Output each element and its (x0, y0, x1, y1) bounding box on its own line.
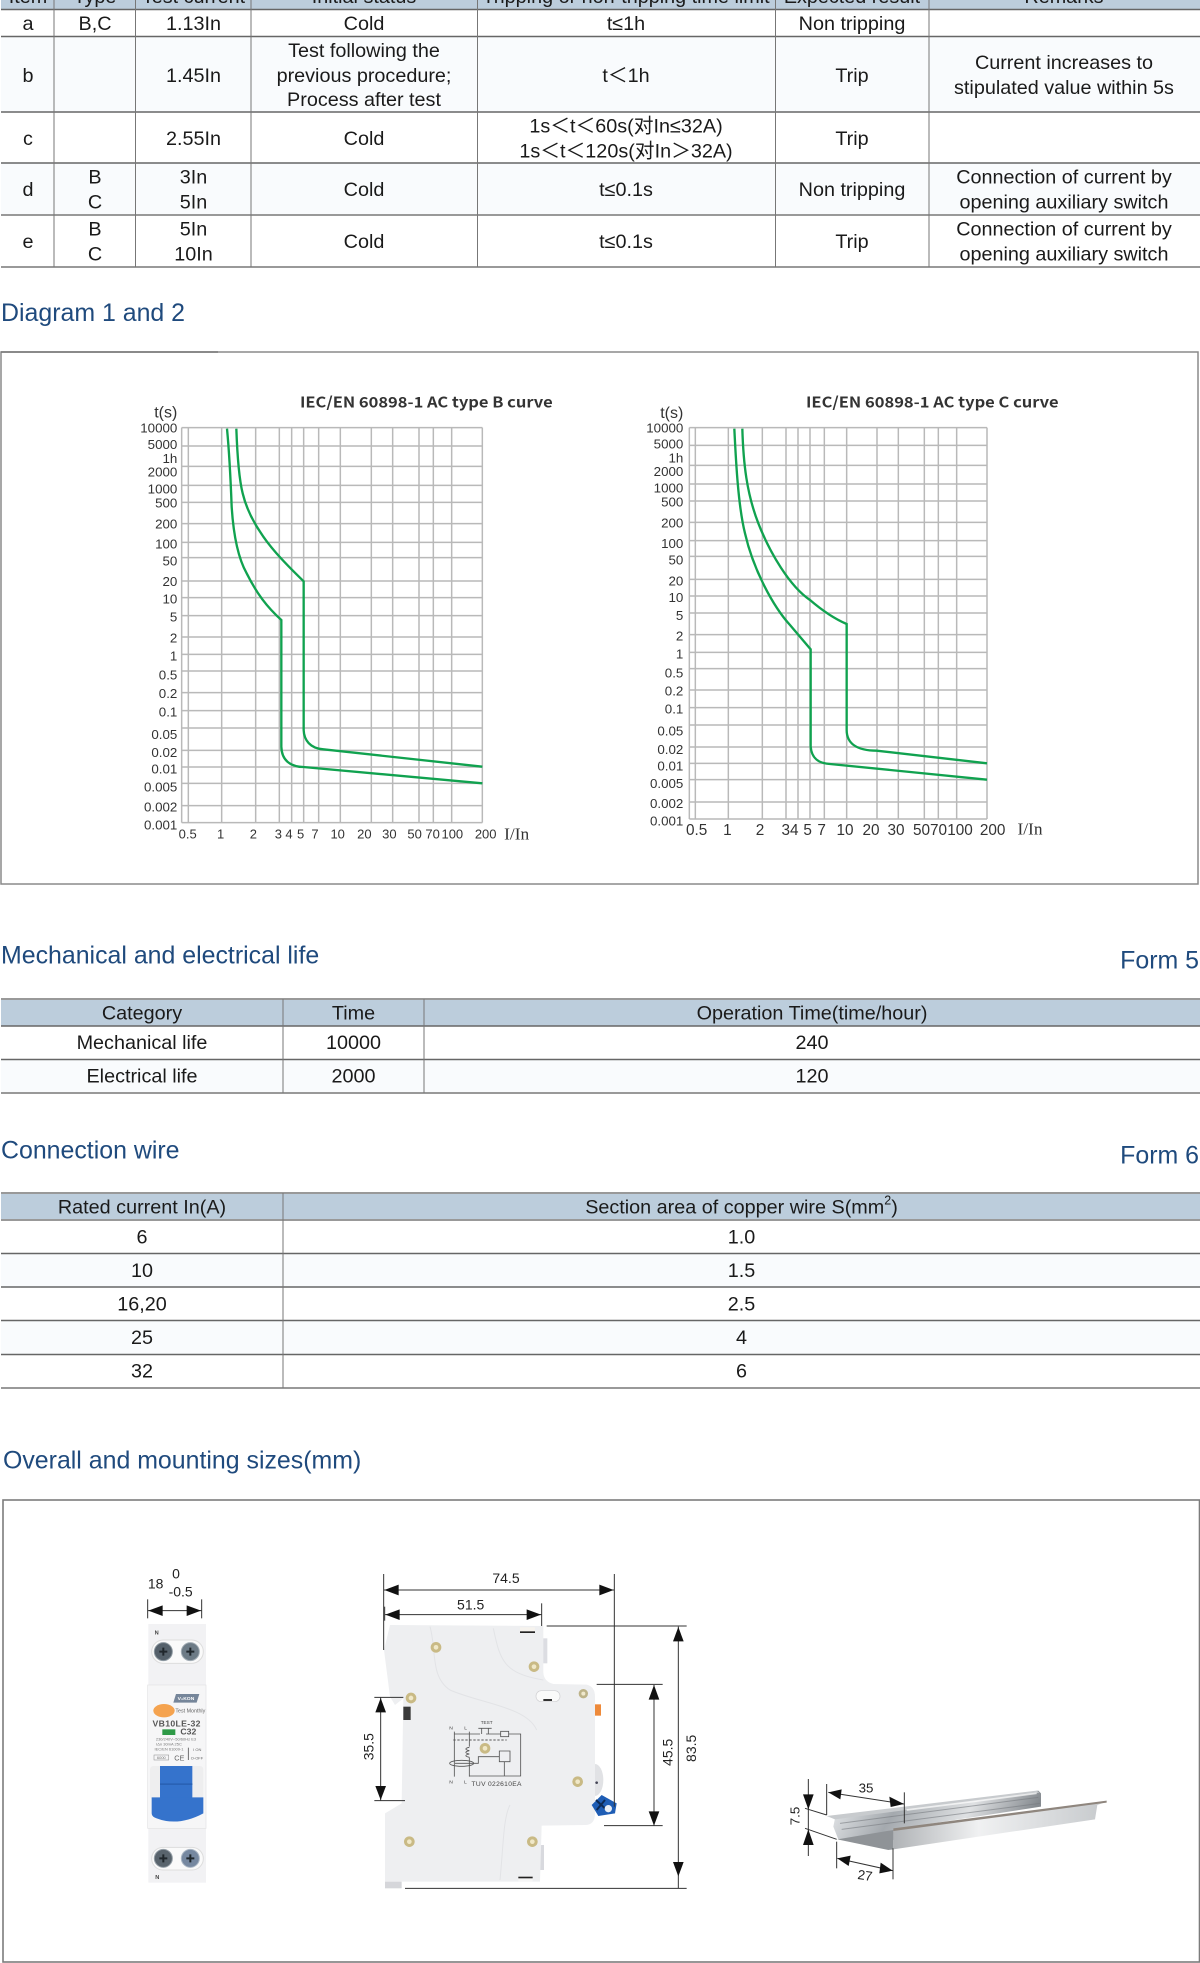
row 32A (131, 1360, 747, 1382)
row a (22, 13, 905, 35)
x axis labels C: 200 (980, 822, 1005, 839)
breaker body front (148, 1624, 206, 1883)
row b (22, 40, 1174, 111)
row d: B (88, 166, 102, 188)
dimension 45.5: 45.5 (660, 1739, 676, 1766)
row e (22, 218, 1172, 266)
electrical life row: Electrical life (86, 1066, 198, 1088)
width dimension: -0.5 (169, 1584, 193, 1600)
y axis labels C: 10000 (646, 420, 683, 435)
row 6A: 1.0 (728, 1226, 755, 1248)
rail body (827, 1791, 1107, 1850)
row 10A: 1.5 (728, 1260, 755, 1282)
width dimension: 0 (172, 1565, 180, 1581)
table: mechanical and electrical life (1, 999, 1200, 1093)
x axis labels B: 20 (357, 827, 372, 842)
header row: ) (891, 1196, 898, 1218)
row c: 1s＜t＜60s(对In≤32A) (529, 116, 723, 138)
x axis labels C: 7 (817, 822, 826, 839)
x axis labels B: 2 (250, 827, 257, 842)
width dimension: 18 (148, 1575, 164, 1591)
dimension 7.5 (787, 1779, 837, 1856)
row e: Cold (344, 231, 384, 253)
row d: t≤0.1s (599, 179, 653, 201)
y axis labels B: 1000 (148, 481, 177, 496)
row b: previous procedure; (277, 65, 451, 87)
row d: Non tripping (799, 179, 905, 201)
row e: Trip (835, 231, 869, 253)
y axis labels C: 0.005 (650, 776, 683, 791)
mechanical life row: Mechanical life (77, 1032, 207, 1054)
dimension 7.5: 7.5 (787, 1807, 802, 1825)
row b: b (22, 65, 34, 87)
breaker body front: C32 (180, 1726, 196, 1736)
row d: Connection of current by (956, 166, 1172, 188)
header row: Operation Time(time/hour) (697, 1002, 927, 1024)
dimension 74.5 (384, 1570, 614, 1807)
x axis labels B: 4 (285, 827, 293, 842)
x axis labels C: 1 (723, 822, 732, 839)
y axis labels C: 0.05 (657, 723, 683, 738)
row 25A: 25 (131, 1327, 153, 1349)
y axis labels C: 5 (676, 608, 683, 623)
row b: Current increases to (975, 52, 1153, 74)
x axis labels B: 1 (217, 827, 224, 842)
wiring schematic: N (449, 1780, 453, 1786)
row b: Process after test (287, 89, 441, 111)
y axis labels C: 2000 (654, 464, 683, 479)
y axis labels B: 200 (155, 516, 177, 531)
y axis labels B: 0.2 (159, 686, 177, 701)
y axis labels B: 0.005 (144, 780, 177, 795)
row a: Non tripping (799, 13, 905, 35)
heading: diagrams: Diagram 1 and 2 (1, 299, 185, 327)
x axis labels B: 10 (330, 827, 345, 842)
wiring schematic: L (464, 1725, 467, 1731)
dimension 35 (827, 1780, 904, 1823)
y axis labels C: 0.002 (650, 796, 683, 811)
front view breaker with width dimension (148, 1565, 206, 1883)
breaker body front: IΔn 30mA 25C (156, 1741, 182, 1746)
x axis labels C (686, 819, 1043, 839)
x axis labels B: 7 (311, 827, 319, 842)
header row (102, 1002, 927, 1024)
electrical life row: 120 (795, 1066, 829, 1088)
row d: d (22, 179, 34, 201)
row a: 1.13In (166, 13, 221, 35)
mechanical life row (77, 1032, 829, 1054)
heading: mechanical and electrical life: Mechanical and electrical life (1, 942, 319, 970)
y axis labels C: 10 (669, 590, 683, 605)
dimension 51.5: 51.5 (457, 1596, 484, 1612)
row a: a (22, 13, 34, 35)
breaker body front: CE (174, 1754, 185, 1763)
x axis labels C: 2 (756, 822, 764, 839)
y axis labels B: 100 (155, 537, 177, 552)
x axis labels C: I/In (1017, 819, 1043, 838)
header row (58, 1194, 898, 1218)
row 6A (136, 1226, 755, 1248)
row a: t≤1h (607, 13, 645, 35)
mechanical life row: 240 (795, 1032, 829, 1054)
x axis labels C: 34 (781, 822, 799, 839)
row 10A (131, 1260, 755, 1282)
dimension 83.5 (405, 1626, 699, 1888)
header row: 2 (884, 1194, 891, 1208)
y axis labels B: 5000 (148, 437, 177, 452)
breaker body front: Test Monthly (175, 1709, 206, 1715)
y axis labels B: 0.01 (151, 762, 177, 777)
x axis labels B: 0.5 (179, 827, 197, 842)
row d: 5In (180, 192, 207, 214)
header row: Rated current In(A) (58, 1196, 226, 1218)
DIN rail with dimensions (787, 1779, 1107, 1884)
breaker body front: O-OFF (191, 1755, 204, 1760)
table: tripping characteristic tests (1, 0, 1200, 267)
electrical life row: 2000 (331, 1066, 376, 1088)
x axis labels C: 0.5 (686, 822, 707, 839)
y axis labels B: 0.5 (159, 668, 177, 683)
form 6 label: Form 6 (1120, 1142, 1199, 1170)
x axis labels B: 3 (275, 827, 282, 842)
breaker body front: 6000 (157, 1755, 167, 1760)
row b: stipulated value within 5s (954, 77, 1174, 99)
y axis labels B: 2 (170, 631, 177, 646)
wiring schematic (449, 1720, 522, 1788)
row 32A: 32 (131, 1360, 153, 1382)
y axis labels B: 2000 (148, 465, 177, 480)
row 16,20A: 2.5 (728, 1294, 755, 1316)
y axis labels C: 50 (669, 553, 683, 568)
row d: C (88, 192, 102, 214)
panel: overall and mounting sizes (3, 1500, 1200, 1962)
row d: Cold (344, 179, 384, 201)
row 25A: 4 (736, 1327, 747, 1349)
row a: B,C (79, 13, 111, 35)
row c: 1s＜t＜120s(对In＞32A) (519, 140, 733, 162)
curve lower B (227, 429, 482, 783)
x axis labels C: 100 (947, 822, 973, 839)
x axis labels B: 100 (441, 827, 463, 842)
chart: type C curve (646, 391, 1059, 839)
y axis labels C: 1h (669, 451, 683, 466)
header row: Time (332, 1002, 375, 1024)
y axis labels C: 0.5 (665, 665, 683, 680)
dimension 45.5 (597, 1684, 676, 1826)
row 6A: 6 (136, 1226, 148, 1248)
side view breaker with dimensions (360, 1570, 699, 1888)
y axis labels B: 10 (163, 592, 177, 607)
y axis labels C: 0.1 (665, 702, 683, 717)
breaker body front: 230/240V~50/60Hz E3 (156, 1736, 197, 1741)
y axis labels C: 0.01 (657, 759, 683, 774)
grid C (689, 428, 987, 819)
heading: connection wire: Connection wire (1, 1136, 179, 1164)
row e: 10In (174, 244, 213, 266)
row b: 1.45In (166, 65, 221, 87)
x axis labels C: 10 (836, 822, 854, 839)
y axis labels C: 500 (661, 495, 683, 510)
width dimension (148, 1565, 202, 1618)
dimension 74.5: 74.5 (492, 1570, 520, 1586)
y axis labels C: t(s) (660, 405, 683, 422)
y axis labels B: 0.1 (159, 704, 177, 719)
row d (22, 166, 1172, 214)
wiring schematic: N (449, 1725, 453, 1731)
x axis labels C: 30 (887, 822, 905, 839)
y axis labels C: 1000 (654, 481, 683, 496)
y axis labels B: 5 (170, 610, 177, 625)
y axis labels C: 0.001 (650, 814, 683, 829)
breaker body front: I ON (193, 1747, 202, 1752)
y axis labels B: 500 (155, 495, 177, 510)
x axis labels B (179, 824, 530, 843)
row c: 2.55In (166, 128, 221, 150)
y axis labels B: 1 (170, 648, 177, 663)
y axis labels C: 100 (661, 536, 683, 551)
form 5 label: Form 5 (1120, 946, 1199, 974)
y axis labels B (140, 404, 177, 832)
breaker body front: N (155, 1875, 159, 1881)
x axis labels B: 30 (382, 827, 397, 842)
x axis labels B: 50 (407, 827, 422, 842)
y axis labels C (646, 405, 683, 829)
breaker body front: VB10LE-32 (153, 1719, 201, 1729)
curve upper C (742, 429, 987, 763)
y axis labels B: 10000 (140, 420, 177, 435)
x axis labels B: I/In (504, 824, 530, 843)
y axis labels C: 5000 (654, 437, 683, 452)
x axis labels B: 70 (425, 827, 440, 842)
y axis labels B: 50 (163, 554, 177, 569)
curve upper B (236, 429, 482, 767)
chart: type B curve (140, 391, 553, 843)
table: connection wire (1, 1193, 1200, 1388)
header row: Section area of copper wire S(mm (585, 1196, 884, 1218)
y axis labels C: 0.2 (665, 683, 683, 698)
dimension 83.5: 83.5 (683, 1735, 699, 1762)
y axis labels B: 0.02 (151, 745, 177, 760)
row c: Cold (344, 128, 384, 150)
row b: Trip (835, 65, 869, 87)
y axis labels C: 20 (669, 573, 683, 588)
row b: t＜1h (602, 65, 650, 87)
row 16,20A (117, 1294, 755, 1316)
row 25A (131, 1327, 747, 1349)
row c: c (23, 128, 33, 150)
heading: overall and mounting sizes: Overall and mounting sizes(mm) (3, 1446, 361, 1474)
row e: t≤0.1s (599, 231, 653, 253)
chart title C: IEC/EN 60898-1 AC type C curve (806, 391, 1059, 412)
row 32A: 6 (736, 1360, 747, 1382)
row d: opening auxiliary switch (960, 192, 1168, 214)
row e: 5In (180, 218, 207, 240)
panel: trip curve diagrams (1, 352, 1198, 884)
y axis labels C: 1 (676, 646, 683, 661)
dimension 35.5: 35.5 (360, 1733, 376, 1760)
dimension 27: 27 (857, 1867, 873, 1884)
wiring schematic: TUV 022610EA (472, 1781, 522, 1788)
breaker body front: V₂KON (178, 1696, 195, 1702)
y axis labels B: t(s) (154, 404, 177, 421)
y axis labels B: 1h (163, 451, 177, 466)
x axis labels B: 5 (297, 827, 304, 842)
row e: opening auxiliary switch (960, 244, 1168, 266)
breaker body front: N (155, 1631, 159, 1637)
x axis labels C: 20 (862, 822, 880, 839)
header row (9, 0, 1104, 8)
row 10A: 10 (131, 1260, 153, 1282)
wiring schematic: TEST (481, 1720, 493, 1725)
x axis labels C: 5 (803, 822, 812, 839)
dimension 35.5 (360, 1697, 405, 1801)
dimension 35: 35 (859, 1780, 873, 1795)
header row: Category (102, 1002, 182, 1024)
row a: Cold (344, 13, 384, 35)
y axis labels C: 0.02 (657, 742, 683, 757)
x axis labels C: 5070 (913, 822, 947, 839)
x axis labels B: 200 (475, 827, 496, 842)
row e: C (88, 244, 102, 266)
curve lower C (734, 429, 987, 780)
electrical life row (86, 1066, 829, 1088)
y axis labels C: 2 (676, 629, 683, 644)
breaker body side (384, 1625, 617, 1888)
breaker body front: IEC/EN 61009-1 (154, 1747, 184, 1752)
y axis labels B: 0.001 (144, 817, 177, 832)
row d: 3In (180, 166, 207, 188)
wiring schematic: L (464, 1780, 467, 1786)
y axis labels B: 20 (163, 574, 177, 589)
y axis labels B: 0.05 (151, 727, 177, 742)
y axis labels B: 0.002 (144, 800, 177, 815)
grid B (182, 428, 482, 823)
y axis labels C: 200 (661, 515, 683, 530)
row b: Test following the (288, 40, 440, 62)
dimension 51.5 (385, 1596, 542, 1626)
row e: e (22, 231, 34, 253)
row e: Connection of current by (956, 218, 1172, 240)
row e: B (88, 218, 102, 240)
mechanical life row: 10000 (326, 1032, 381, 1054)
screws (404, 1642, 588, 1847)
dimension 27 (837, 1842, 893, 1884)
row 16,20A: 16,20 (117, 1294, 167, 1316)
row c (23, 116, 869, 162)
row c: Trip (835, 128, 869, 150)
chart title B: IEC/EN 60898-1 AC type B curve (300, 391, 553, 412)
